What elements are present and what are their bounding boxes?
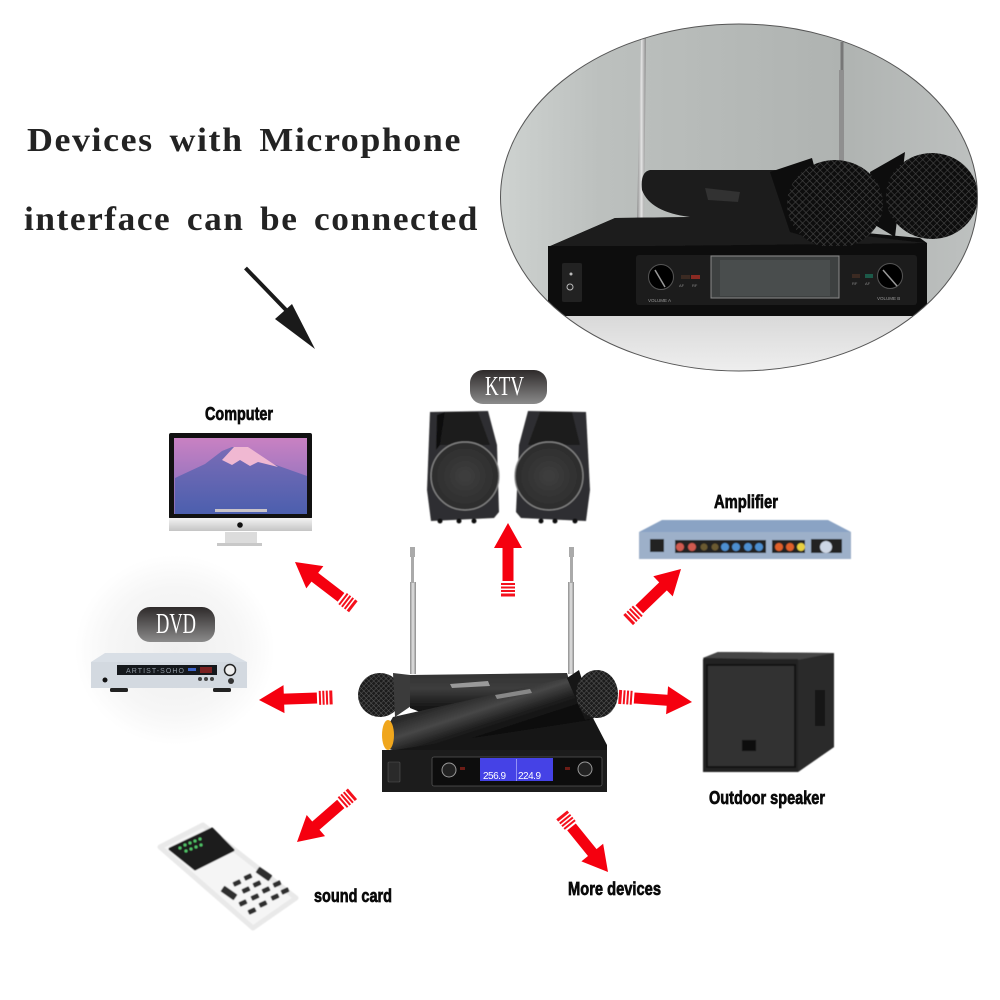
panel: product photo: RF bbox=[852, 281, 858, 286]
label: Outdoor speaker: Outdoor speaker bbox=[709, 788, 825, 808]
arrow: black pointer bbox=[246, 268, 315, 349]
device: DVD player: ARTIST-SOHO bbox=[126, 668, 185, 675]
panel: product photo: VOLUME B bbox=[877, 296, 900, 301]
label: Amplifier: Amplifier bbox=[714, 492, 778, 512]
heading: interface can be connected bbox=[24, 201, 479, 238]
label: More devices: More devices bbox=[568, 879, 661, 899]
arrow to DVD bbox=[259, 683, 333, 714]
heading bbox=[24, 122, 479, 238]
label: KTV: KTV bbox=[485, 371, 524, 401]
label: sound card: sound card bbox=[314, 886, 392, 906]
arrow to outdoor speaker bbox=[618, 683, 693, 716]
central device: wireless microphones and receiver: 224.9 bbox=[518, 771, 541, 782]
device: outdoor speaker bbox=[703, 652, 834, 808]
arrow to more devices bbox=[551, 806, 619, 881]
panel: product photo bbox=[490, 14, 990, 376]
device: sound card bbox=[160, 825, 392, 928]
arrow to sound card bbox=[288, 783, 362, 853]
arrow to amplifier bbox=[618, 559, 691, 630]
heading: Devices with Microphone bbox=[27, 122, 462, 159]
label: DVD: DVD bbox=[156, 608, 196, 640]
panel: product photo: AF bbox=[679, 283, 685, 288]
device: amplifier bbox=[639, 492, 851, 559]
arrows: signal directions bbox=[259, 523, 693, 881]
device: KTV speakers bbox=[427, 370, 590, 524]
soft glow behind DVD bbox=[75, 555, 275, 745]
central device: wireless microphones and receiver: 256.9 bbox=[483, 771, 506, 782]
central device: wireless microphones and receiver bbox=[358, 547, 618, 792]
device: DVD player bbox=[91, 607, 247, 692]
label: Computer: Computer bbox=[205, 404, 273, 424]
device: computer bbox=[169, 404, 312, 546]
label: KTV bbox=[470, 370, 547, 404]
label: DVD bbox=[137, 607, 215, 642]
panel: product photo: RF bbox=[692, 283, 698, 288]
arrow to KTV bbox=[494, 523, 522, 596]
panel: product photo: AF bbox=[865, 281, 871, 286]
panel: product photo: VOLUME A bbox=[648, 298, 671, 303]
arrow to computer bbox=[286, 551, 362, 618]
